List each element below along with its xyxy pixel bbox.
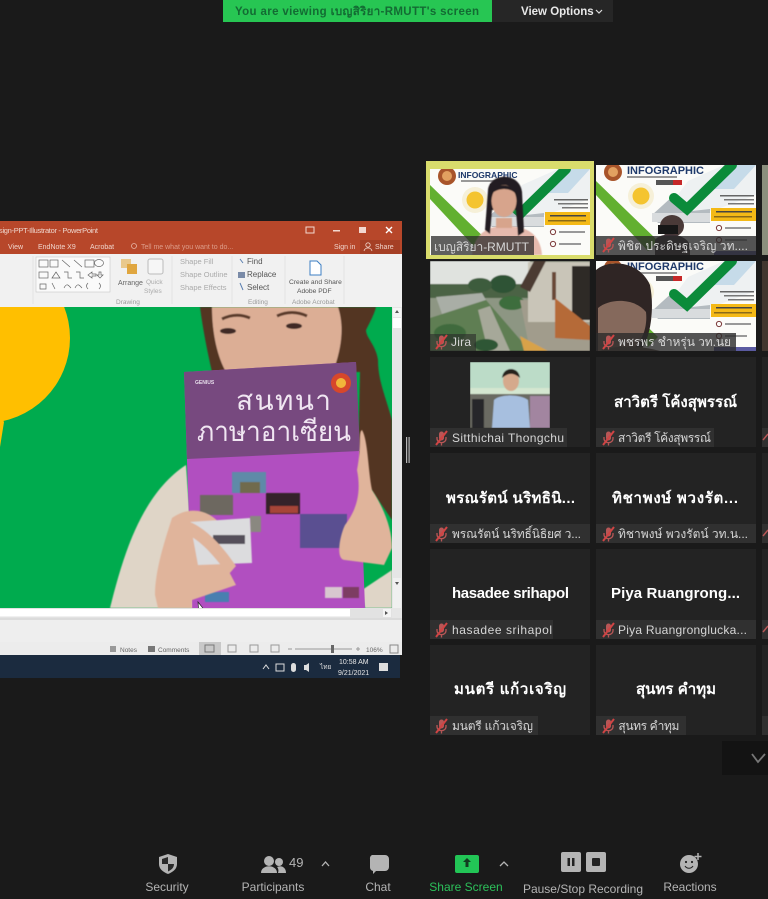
book: สนทนา	[236, 385, 331, 416]
title bar: sign-PPT-Illustrator - PowerPoint	[0, 226, 99, 235]
woman holding book	[110, 307, 392, 608]
ribbon: Drawing	[116, 299, 140, 306]
ribbon: Shape Outline	[180, 270, 228, 279]
tile: สาวิตรี: สาวิตรี โค้งสุพรรณ์	[618, 431, 711, 446]
ribbon: Editing	[248, 299, 268, 306]
windows taskbar: 9/21/2021	[338, 670, 369, 677]
tile: participant with slide background 1	[596, 163, 756, 255]
hands	[155, 430, 392, 608]
panel divider handle	[406, 437, 410, 463]
tile: มนตรี: มนตรี แก้วเจริญ	[452, 719, 533, 733]
tile: ทิชาพงษ์: ทิชาพงษ์ พวงรัตน์ วท.น...	[618, 527, 748, 541]
tile: สุนทร	[596, 645, 756, 735]
tile: Piya Ruangrong: Piya Ruangrong...	[611, 585, 740, 602]
tile: พรณรัตน์: พรณรัตน์ นริทธินิ...	[446, 489, 575, 507]
tile: สาวิตรี: สาวิตรี โค้งสุพรรณ์	[614, 392, 737, 412]
toolbar: security	[145, 854, 189, 894]
tile: hasadee srihapol: hasadee srihapol	[452, 623, 552, 637]
toolbar: chat: Chat	[365, 880, 391, 894]
toolbar: participants: Participants	[242, 880, 304, 894]
toolbar: pause/stop recording: Pause/Stop Recording	[523, 882, 643, 896]
status bar: Comments	[158, 647, 190, 654]
profile photo	[470, 362, 550, 428]
tile: participant with slide background 2: พชรพร ชำหรุ่น วท.นย	[618, 335, 731, 350]
ribbon	[0, 254, 402, 307]
ribbon tabs: Sign in	[334, 244, 356, 251]
tile: Jira	[430, 261, 590, 351]
slide canvas	[0, 307, 392, 608]
tile: มนตรี	[430, 645, 590, 735]
ribbon tabs: Acrobat	[90, 244, 114, 251]
ribbon: Adobe PDF	[297, 288, 332, 295]
toolbar: participants: 49	[289, 855, 303, 870]
tile: hasadee srihapol	[430, 549, 590, 639]
windows taskbar: 10:58 AM	[339, 659, 369, 666]
ribbon tabs: EndNote X9	[38, 244, 76, 251]
tile: Sitthichai Thongchu: Sitthichai Thongchu	[452, 431, 564, 445]
ribbon tabs	[8, 240, 400, 254]
ribbon: Quick	[146, 279, 163, 286]
toolbar: security: Security	[145, 880, 189, 894]
ribbon tabs: Share	[375, 244, 394, 251]
windows taskbar	[0, 655, 400, 678]
tile: ทิชาพงษ์: ทิชาพงษ์ พวงรัต...	[612, 489, 738, 507]
view options button	[492, 0, 613, 22]
toolbar: reactions	[663, 853, 717, 894]
ribbon: Adobe Acrobat	[292, 299, 335, 306]
ribbon tabs: Tell me what you want to do...	[141, 244, 233, 251]
ribbon: Find	[247, 257, 263, 266]
tile: participant with slide background 1: INFOGRAPHIC	[627, 165, 704, 177]
ribbon: Select	[247, 283, 270, 292]
view options button: View Options	[521, 6, 594, 18]
tile: สุนทร: สุนทร คำทุม	[618, 719, 679, 734]
ribbon: Arrange	[118, 280, 143, 287]
status bar: Notes	[120, 647, 138, 654]
tile: participant with slide background 1: พิชิต ประดิษฐเจริญ วท....	[618, 239, 748, 253]
tile: Piya Ruangrong	[596, 549, 756, 639]
ribbon: Styles	[144, 288, 162, 295]
ribbon: Shape Effects	[180, 283, 227, 292]
book photo tiles	[200, 472, 359, 602]
book: ภาษาอาเซียน	[197, 416, 351, 447]
top viewing banner	[223, 0, 492, 22]
tile: active speaker: เบญสิริยา-RMUTT	[434, 240, 530, 254]
tile: พรณรัตน์	[430, 453, 590, 543]
tile: Piya Ruangrong: Piya Ruangronglucka...	[618, 623, 747, 637]
toolbar: participants	[242, 855, 329, 894]
horizontal scrollbar and notes area	[0, 608, 402, 642]
book: GENIUS	[195, 380, 215, 386]
tile: มนตรี: มนตรี แก้วเจริญ	[454, 680, 566, 698]
tile: active speaker: INFOGRAPHIC	[458, 170, 518, 180]
shared PowerPoint window	[0, 221, 402, 678]
windows taskbar: ไทย	[319, 663, 332, 671]
tile: Sitthichai Thongchu	[430, 357, 590, 447]
mouse cursor	[198, 601, 204, 608]
tile: participant with slide background 2: INFOGRAPHIC	[627, 261, 704, 273]
title bar	[0, 221, 402, 254]
scroll down button	[722, 741, 768, 775]
vertical scrollbar	[392, 307, 402, 618]
tile: ทิชาพงษ์	[596, 453, 756, 543]
tile: participant with slide background 2	[596, 259, 756, 351]
ribbon: Create and Share	[289, 279, 342, 286]
toolbar: share screen	[429, 855, 508, 894]
status bar	[0, 642, 402, 655]
tile: สาวิตรี	[596, 357, 756, 447]
tile: active speaker	[426, 161, 594, 259]
presenter	[472, 177, 542, 255]
third column of cropped tiles	[762, 165, 768, 735]
book	[184, 362, 365, 608]
ribbon: Replace	[247, 270, 277, 279]
tile: hasadee srihapol: hasadee srihapol	[452, 585, 569, 602]
top viewing banner: You are viewing เบญสิริยา-RMUTT's screen	[235, 5, 479, 18]
tile: พรณรัตน์: พรณรัตน์ นริทธิ์นิธิยศ ว...	[452, 525, 581, 541]
status bar: 106%	[366, 647, 383, 654]
toolbar: share screen: Share Screen	[429, 880, 503, 894]
tile: Jira: Jira	[451, 335, 471, 349]
ribbon tabs: View	[8, 244, 24, 251]
yellow speech circle	[0, 307, 70, 447]
toolbar: reactions: Reactions	[663, 880, 717, 894]
toolbar: chat	[365, 855, 391, 894]
ribbon: Shape Fill	[180, 257, 214, 266]
toolbar: pause/stop recording	[523, 852, 643, 896]
tile: สุนทร: สุนทร คำทุม	[636, 681, 716, 699]
